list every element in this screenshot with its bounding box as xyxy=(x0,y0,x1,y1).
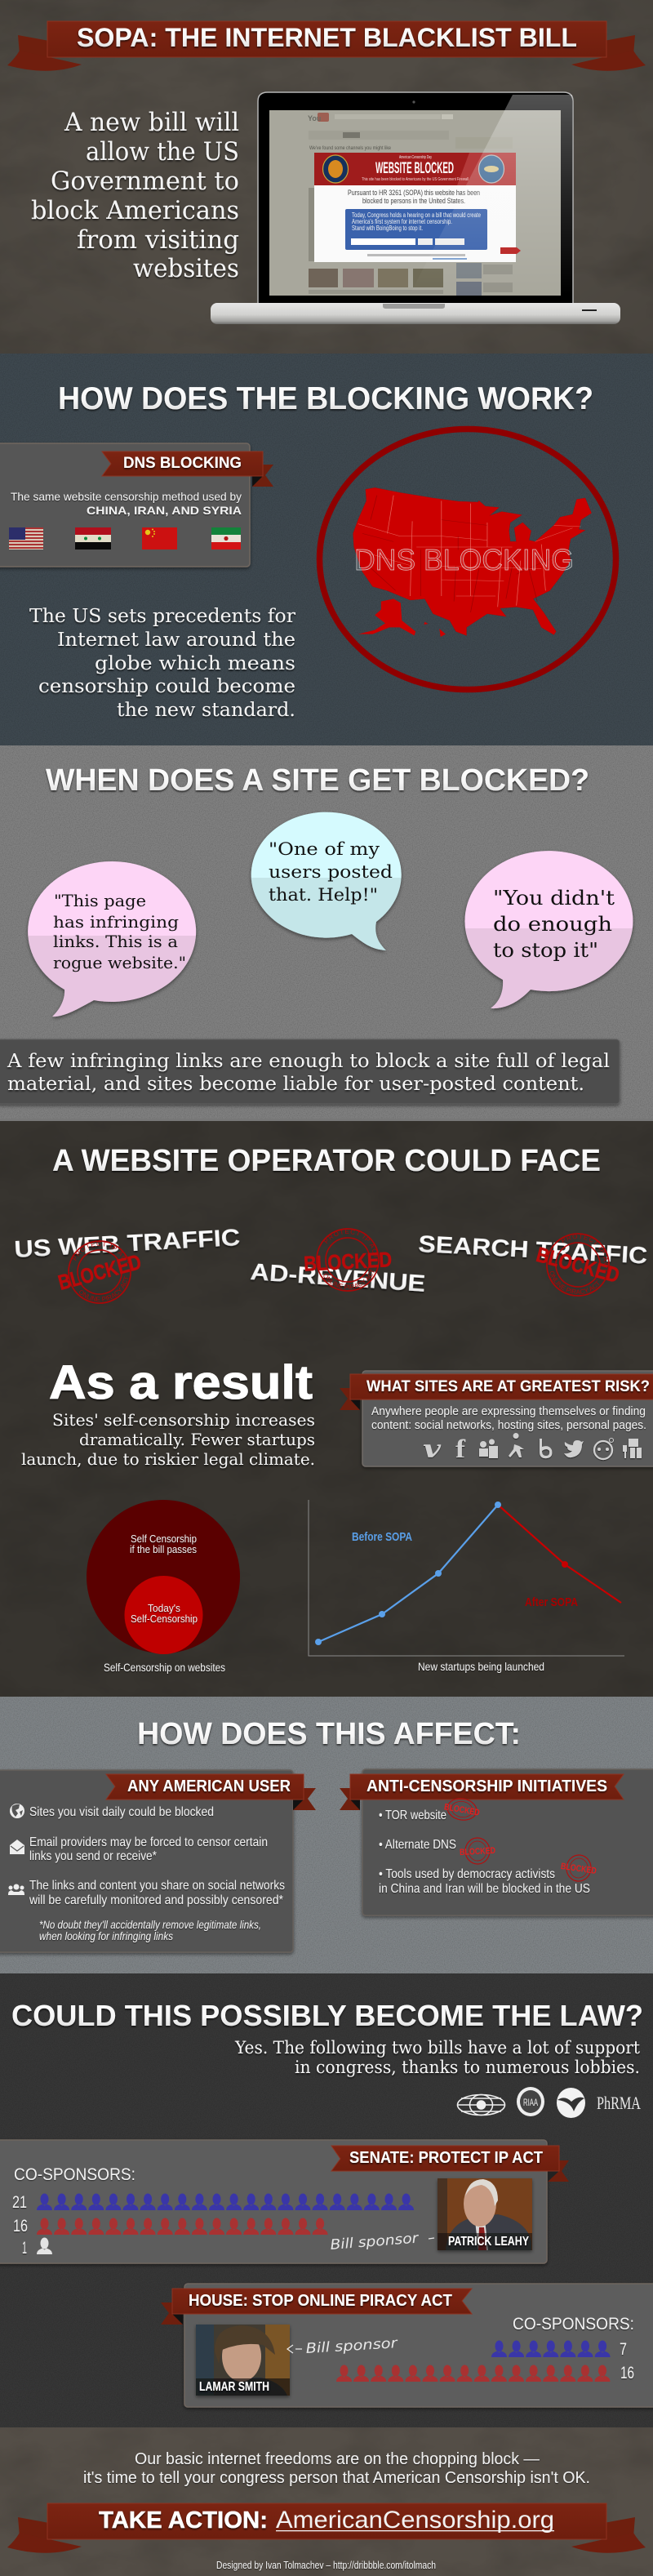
heading: how does this affect: HOW DOES THIS AFFECT: xyxy=(137,1717,521,1751)
screen: youtube page: You xyxy=(308,114,321,122)
footnote: *No doubt they'll accidentally remove legitimate links, xyxy=(39,1918,261,1931)
screen: youtube page xyxy=(308,113,513,296)
section: could this become law xyxy=(0,1973,653,2427)
banner: take action: TAKE ACTION: xyxy=(99,2507,268,2534)
laptop with blocked site screenshot xyxy=(211,92,620,324)
text: social networks: will be carefully monitored and possibly censored* xyxy=(29,1893,283,1907)
ribbon: house: HOUSE: STOP ONLINE PIRACY ACT xyxy=(189,2292,452,2310)
item: ad revenue blocked xyxy=(250,1228,426,1297)
flag: China xyxy=(142,527,177,549)
heading: when does a site get blocked: WHEN DOES A SITE GET BLOCKED? xyxy=(46,763,589,798)
stamp: blocked: BLOCKED xyxy=(303,1247,393,1276)
text: precedents: Internet law around the xyxy=(57,630,295,651)
popup: website blocked: American Censorship Day xyxy=(399,155,432,160)
stamp: blocked: PROTECT IP ACT xyxy=(562,1235,609,1272)
list item: TOR: • TOR website xyxy=(379,1809,446,1822)
text: precedents: globe which means xyxy=(95,653,295,674)
intro text: websites xyxy=(133,254,239,283)
ribbon: any american user: ANY AMERICAN USER xyxy=(127,1777,291,1795)
text: yes: Yes. The following two bills have a lot of support xyxy=(234,2038,641,2058)
icon: globe xyxy=(10,1804,24,1818)
footnote xyxy=(39,1918,261,1942)
icons: social networks: f xyxy=(455,1434,465,1463)
photo: Lamar Smith xyxy=(196,2325,290,2396)
panel: greatest risk xyxy=(340,1371,653,1466)
popup: website blocked: Today, Congress holds a hearing on a bill that would create xyxy=(352,211,481,219)
banner: take action: AmericanCensorship.org xyxy=(276,2507,554,2534)
ribbon: anti-censorship initiatives xyxy=(340,1774,624,1810)
list item: alternate DNS: • Alternate DNS xyxy=(379,1838,456,1852)
ribbon: greatest risk: WHAT SITES ARE AT GREATEST RISK? xyxy=(366,1378,650,1395)
panel text: The same website censorship method used by xyxy=(11,490,242,503)
mini stamp: alternate DNS xyxy=(459,1837,496,1865)
ribbon: any american user xyxy=(106,1774,316,1810)
text: social networks: The links and content you share on social networks xyxy=(29,1879,285,1893)
count: 21: 21 xyxy=(12,2193,27,2212)
icon: people xyxy=(8,1884,24,1895)
item: ad revenue blocked: AD-REVENUE xyxy=(250,1259,426,1297)
popup: website blocked: Pursuant to HR 3261 (SOPA) this website has been xyxy=(348,189,480,198)
speech bubble: rogue website: links. This is a xyxy=(53,932,178,951)
speech bubble: rogue website: has infringing xyxy=(53,912,179,932)
mini stamp: TOR: BLOCKED xyxy=(443,1802,481,1818)
intro text: Government to xyxy=(51,167,239,196)
stamp: blocked: PROTECT IP ACT xyxy=(73,1241,129,1264)
text: email providers xyxy=(29,1835,268,1863)
arrow: to Patrick Leahy xyxy=(429,2233,443,2242)
chart: self-censorship circles: if the bill passes xyxy=(130,1543,197,1555)
flag: Iran xyxy=(211,527,241,549)
popup: website blocked: blocked to persons in the United States. xyxy=(362,197,465,206)
logo: RIAA xyxy=(517,2087,544,2116)
ribbon: anti-censorship initiatives: ANTI-CENSORSHIP INITIATIVES xyxy=(366,1777,607,1795)
icons: social networks xyxy=(423,1433,642,1464)
count: 16: 16 xyxy=(13,2217,28,2236)
logo: swoosh xyxy=(557,2088,585,2118)
panel: any american user xyxy=(0,1770,316,1952)
pictogram: red senators xyxy=(37,2218,328,2235)
popup: website blocked xyxy=(314,153,521,262)
section: take action xyxy=(0,2427,653,2576)
text: sites blocked: Sites you visit daily could be blocked xyxy=(29,1805,214,1819)
list item: tools: • Tools used by democracy activists xyxy=(379,1867,555,1881)
count: 16: 16 xyxy=(620,2364,634,2382)
heading: how does the blocking work: HOW DOES THE BLOCKING WORK? xyxy=(58,381,593,416)
panel: senate protect ip act xyxy=(0,2140,569,2263)
stamp: blocked: BLOCKED xyxy=(56,1249,144,1295)
text: email providers: links you send or receive* xyxy=(29,1849,157,1863)
ribbon: dns blocking: DNS BLOCKING xyxy=(123,455,242,472)
panel: dns blocking xyxy=(0,443,273,567)
item: search traffic blocked: SEARCH TRAFFIC xyxy=(418,1231,648,1270)
ribbon: house xyxy=(161,2289,472,2325)
text: precedents xyxy=(29,606,295,721)
panel text: countries: CHINA, IRAN, AND SYRIA xyxy=(87,504,242,517)
intro text: A new bill will xyxy=(64,108,239,137)
arrow: to Lamar Smith xyxy=(287,2345,302,2353)
text: self-censorship increases: launch, due to riskier legal climate. xyxy=(21,1449,315,1469)
speech bubble: not enough: to stop it" xyxy=(493,939,598,962)
logos: lobbies xyxy=(457,2087,641,2118)
closing text xyxy=(83,2450,590,2487)
closing text: it's time to tell your congress person that American Censorship isn't OK. xyxy=(83,2469,590,2487)
speech bubble: rogue website xyxy=(28,861,196,1017)
count: 1: 1 xyxy=(22,2239,27,2258)
title: SOPA: THE INTERNET BLACKLIST BILL xyxy=(77,23,577,52)
mini stamp: alternate DNS: BLOCKED xyxy=(460,1846,495,1857)
caption: startups: New startups being launched xyxy=(418,1660,544,1673)
speech bubble: users posted: "One of my xyxy=(269,839,380,859)
intro text: block Americans xyxy=(31,196,239,225)
text: self-censorship increases: dramatically. Fewer startups xyxy=(79,1430,315,1449)
pictogram: red representatives xyxy=(336,2365,611,2382)
text: yes: in congress, thanks to numerous lobbies. xyxy=(295,2058,640,2077)
stamp: blocked xyxy=(303,1228,393,1292)
speech bubble: not enough xyxy=(464,851,633,1008)
callout: infringing links: A few infringing links are enough to block a site full of legal xyxy=(7,1051,610,1072)
text: email providers: Email providers may be forced to censor certain xyxy=(29,1835,268,1849)
label: co-sponsors: CO-SPONSORS: xyxy=(513,2315,634,2334)
mini stamp: tools: BLOCKED xyxy=(560,1862,597,1876)
map outline xyxy=(353,487,591,637)
section: intro xyxy=(0,0,653,354)
speech bubble: users posted xyxy=(251,812,402,950)
flag: Syria xyxy=(75,527,111,549)
section: when does a site get blocked xyxy=(0,745,653,1119)
stamp: blocked: ONLINE PIRACY ACT xyxy=(323,1269,375,1289)
screen: youtube page: We've found some channels you might like xyxy=(309,146,392,151)
pictogram: independent senator xyxy=(37,2237,52,2254)
item: search traffic blocked xyxy=(418,1231,648,1297)
callout: infringing links: material, and sites become liable for user-posted content. xyxy=(7,1074,584,1095)
speech bubble: rogue website: rogue website." xyxy=(53,953,186,972)
ribbon: greatest risk xyxy=(340,1374,653,1410)
chart: startups line chart xyxy=(309,1500,624,1673)
photo: Patrick Leahy xyxy=(438,2178,532,2250)
intro text xyxy=(31,108,239,283)
chart: self-censorship circles: Self-Censorship xyxy=(131,1613,198,1625)
note: bill sponsor: Bill sponsor xyxy=(330,2230,420,2253)
closing text: Our basic internet freedoms are on the chopping block — xyxy=(135,2450,540,2468)
text: self-censorship increases: Sites' self-censorship increases xyxy=(52,1410,315,1430)
item: us web traffic blocked: US WEB TRAFFIC xyxy=(14,1225,241,1263)
popup: website blocked: This site has been blocked to Americans by the US Government Firewall xyxy=(362,177,469,182)
speech bubble: not enough: "You didn't xyxy=(493,887,615,910)
popup: website blocked: Stand with BoingBoing to stop it. xyxy=(352,225,423,232)
text: precedents: The US sets precedents for xyxy=(29,606,295,627)
banner: take action xyxy=(7,2503,646,2553)
text: social networks xyxy=(29,1879,285,1907)
count: 7: 7 xyxy=(620,2340,627,2359)
heading: a website operator could face: A WEBSITE OPERATOR COULD FACE xyxy=(52,1144,601,1178)
pictogram: blue senators xyxy=(37,2193,414,2210)
chart: self-censorship circles: Self Censorship xyxy=(131,1533,197,1545)
photo: Lamar Smith: LAMAR SMITH xyxy=(199,2380,269,2394)
ribbon: senate: SENATE: PROTECT IP ACT xyxy=(349,2149,543,2167)
footnote: when looking for infringing links xyxy=(39,1929,173,1942)
label: co-sponsors: CO-SPONSORS: xyxy=(14,2165,135,2184)
item: us web traffic blocked xyxy=(14,1225,241,1304)
photo: Patrick Leahy: PATRICK LEAHY xyxy=(448,2235,529,2249)
map label: DNS BLOCKING xyxy=(354,543,574,576)
stamp: blocked xyxy=(534,1233,622,1297)
chart: startups line chart: Before SOPA xyxy=(352,1530,412,1544)
chart: self-censorship circles xyxy=(87,1500,240,1674)
list item: tools xyxy=(379,1867,590,1896)
stamp: blocked: BLOCKED xyxy=(534,1242,622,1288)
popup: website blocked: WEBSITE BLOCKED xyxy=(375,160,454,177)
logo: MPAA xyxy=(457,2095,505,2115)
stamp: blocked: PROTECT IP ACT xyxy=(324,1230,378,1258)
map: blocked United States in circle xyxy=(320,429,615,689)
footer credit: Designed by Ivan Tolmachev – http://dribbble.com/itolmach xyxy=(216,2559,436,2571)
chart: startups line chart: After SOPA xyxy=(525,1595,578,1609)
mini stamp: tools xyxy=(559,1853,598,1884)
panel: house stop online piracy act xyxy=(161,2284,653,2407)
heading: could this possibly become the law: COULD THIS POSSIBLY BECOME THE LAW? xyxy=(11,1999,643,2032)
list item: tools: in China and Iran will be blocked in the US xyxy=(379,1882,590,1896)
section: website operator could face xyxy=(0,1119,653,1675)
mini stamp: TOR xyxy=(442,1795,482,1823)
section: how does the blocking work xyxy=(0,354,653,745)
speech bubble: users posted: users posted xyxy=(269,862,393,882)
icon: envelope xyxy=(10,1840,24,1854)
ribbon: senate xyxy=(331,2146,569,2182)
stamp: blocked: ONLINE PIRACY ACT xyxy=(550,1270,599,1294)
stamp: blocked: ONLINE PIRACY ACT xyxy=(79,1275,129,1301)
text: precedents: censorship could become xyxy=(38,676,295,697)
speech bubble: not enough: do enough xyxy=(493,913,612,936)
chart: self-censorship circles: Today's xyxy=(148,1602,180,1614)
pictogram: blue representatives xyxy=(491,2340,611,2357)
text: precedents: the new standard. xyxy=(117,700,295,721)
callout: infringing links xyxy=(0,1039,620,1104)
title banner xyxy=(7,21,646,71)
speech bubble: users posted: that. Help!" xyxy=(269,885,378,905)
note: bill sponsor: Bill sponsor xyxy=(305,2335,398,2357)
ribbon: dns blocking xyxy=(102,452,273,487)
icons: social networks: v xyxy=(423,1435,442,1464)
heading: as a result: As a result xyxy=(49,1356,313,1409)
stamp: blocked xyxy=(56,1240,144,1304)
logo: RIAA: RIAA xyxy=(523,2097,538,2108)
popup: website blocked: America's first system for internet censorship. xyxy=(352,218,452,225)
caption: self-censorship: Self-Censorship on websites xyxy=(104,1661,225,1674)
section: how does this affect xyxy=(0,1697,653,1973)
panel: anti-censorship initiatives xyxy=(340,1769,653,1915)
intro text: from visiting xyxy=(77,225,239,255)
speech bubble: rogue website: "This page xyxy=(54,891,146,910)
text: self-censorship increases xyxy=(21,1410,315,1469)
text: yes xyxy=(234,2038,641,2077)
flag: USA xyxy=(9,527,43,549)
intro text: allow the US xyxy=(86,137,239,167)
